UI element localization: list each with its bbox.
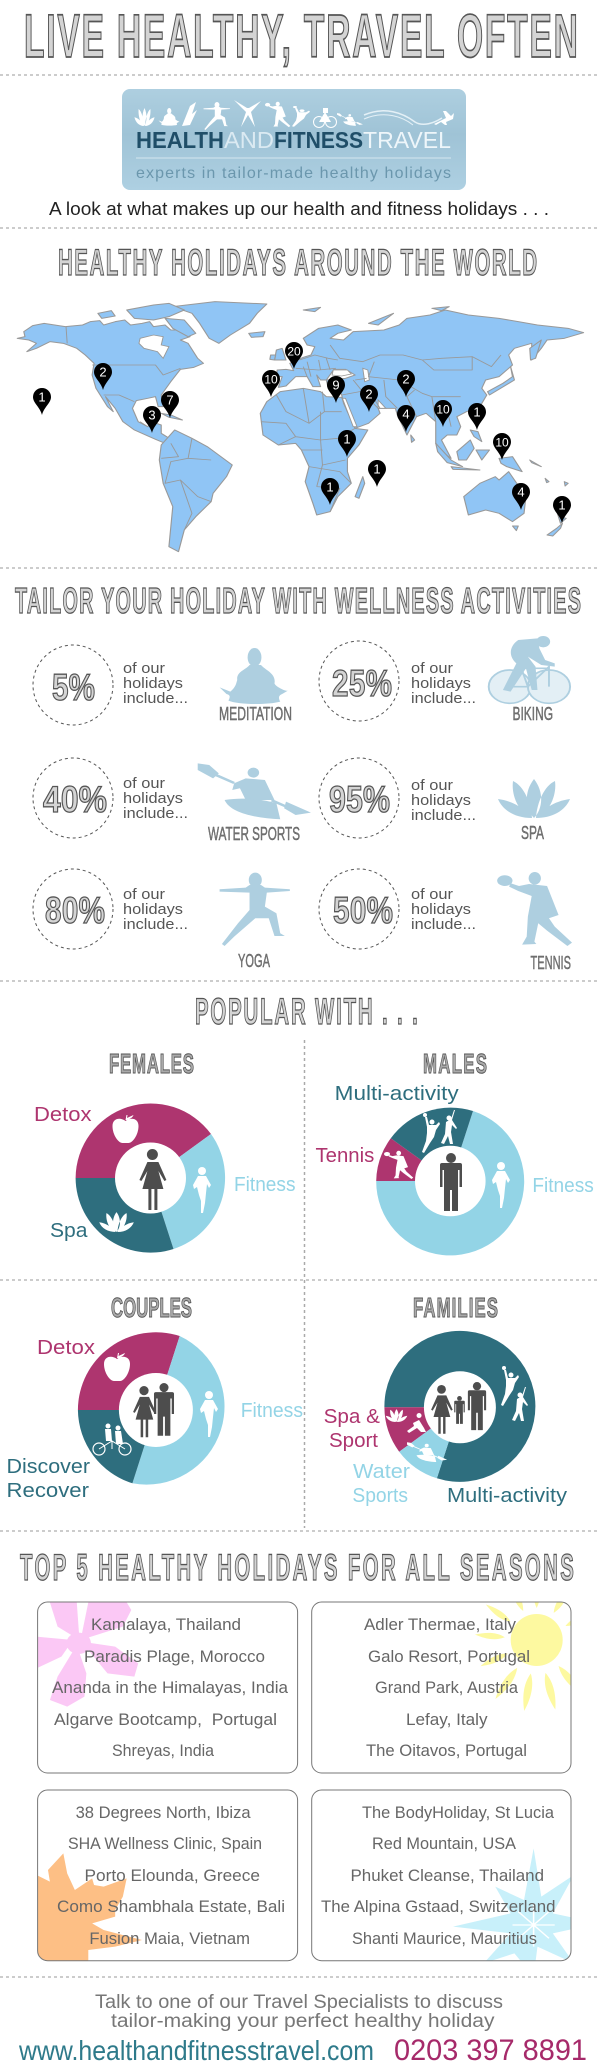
panel: biking stat: BIKING bbox=[512, 704, 553, 724]
list: winter holidays: The BodyHoliday, St Lucia bbox=[362, 1803, 555, 1822]
pin: 1 New Zealand bbox=[553, 496, 571, 523]
logo activity silhouettes bbox=[134, 100, 454, 130]
pin: 1 Kenya: 1 bbox=[343, 432, 351, 446]
pin: 1 New Zealand: 1 bbox=[558, 498, 566, 512]
panel: males: MALES bbox=[423, 1048, 487, 1079]
pin: 1 Kenya bbox=[338, 430, 356, 457]
list: autumn holidays: 38 Degrees North, Ibiza bbox=[76, 1803, 251, 1822]
donut chart: males bbox=[376, 1108, 524, 1255]
call to action: tailor-making your perfect healthy holiday bbox=[111, 2011, 495, 2032]
panel: families: Sport bbox=[329, 1430, 378, 1452]
panel: couples: Fitness bbox=[241, 1400, 303, 1422]
list: spring holidays: Shreyas, India bbox=[112, 1741, 214, 1760]
logo wordmark: AND bbox=[224, 127, 274, 153]
list: autumn holidays bbox=[57, 1803, 285, 1948]
list: spring holidays: Algarve Bootcamp, Portugal bbox=[54, 1710, 277, 1729]
list: winter holidays: Red Mountain, USA bbox=[372, 1834, 517, 1853]
panel: tennis stat: holidays bbox=[411, 901, 471, 918]
pin: 10 Indonesia bbox=[493, 433, 511, 460]
panel: females: Spa bbox=[50, 1220, 88, 1242]
list: summer holidays bbox=[364, 1615, 530, 1760]
panel: couples: Detox bbox=[37, 1337, 95, 1359]
list: summer holidays: Lefay, Italy bbox=[406, 1710, 488, 1729]
list: autumn holidays: Fusion Maia, Vietnam bbox=[89, 1929, 250, 1948]
pin: 1 Philippines: 1 bbox=[473, 404, 481, 420]
list: summer holidays: Adler Thermae, Italy bbox=[364, 1615, 516, 1634]
panel: meditation stat: of our bbox=[123, 660, 165, 677]
pin: 1 Hawaii: 1 bbox=[38, 390, 46, 404]
panel: summer list bbox=[311, 1602, 572, 1774]
logo wordmark: TRAVEL bbox=[363, 127, 451, 153]
panel: spa stat: include... bbox=[411, 807, 476, 824]
logo tagline: experts in tailor-made healthy holidays bbox=[136, 165, 451, 182]
panel: biking stat: holidays bbox=[411, 675, 471, 692]
pin: 2 California: 2 bbox=[99, 364, 107, 380]
panel: tennis stat: include... bbox=[411, 916, 476, 933]
panel: yoga stat: YOGA bbox=[238, 951, 270, 971]
pin: 7 Caribbean bbox=[161, 391, 179, 418]
panel: water sports stat: WATER SPORTS bbox=[208, 824, 300, 844]
pin: 2 Himalayas: 2 bbox=[402, 372, 410, 386]
pin: 20 Central Europe: 20 bbox=[287, 344, 301, 358]
panel: meditation stat: 5% bbox=[52, 668, 95, 709]
pin: 3 Mexico: 3 bbox=[148, 408, 156, 422]
logo panel bbox=[122, 89, 466, 190]
map pins bbox=[33, 342, 571, 523]
list: autumn holidays: Como Shambhala Estate, Bali bbox=[57, 1897, 285, 1916]
panel: females: FEMALES bbox=[109, 1048, 194, 1079]
panel: tennis stat: 50% bbox=[333, 891, 393, 932]
phone number: 0203 397 8891 bbox=[394, 2034, 587, 2067]
panel: tennis stat: of our bbox=[411, 886, 453, 903]
pin: 1 Hawaii bbox=[33, 388, 51, 415]
panel: females: Fitness bbox=[234, 1174, 296, 1196]
icon: tennis player bbox=[497, 872, 572, 946]
panel: males: Fitness bbox=[532, 1175, 594, 1197]
panel: meditation stat: include... bbox=[123, 690, 188, 707]
panel: spa stat: 95% bbox=[329, 779, 390, 821]
panel: families: FAMILIES bbox=[413, 1292, 498, 1323]
list: spring holidays: Kamalaya, Thailand bbox=[91, 1615, 241, 1634]
panel: biking stat: 25% bbox=[332, 664, 392, 705]
panel: families: Spa & bbox=[324, 1406, 381, 1428]
panel: meditation stat: MEDITATION bbox=[219, 704, 292, 724]
donut chart: females bbox=[76, 1103, 225, 1253]
pin: 20 Central Europe bbox=[285, 342, 303, 369]
panel: spa stat bbox=[319, 758, 570, 843]
panel: families: Multi-activity bbox=[447, 1485, 567, 1507]
list: winter holidays: Shanti Maurice, Mauritius bbox=[352, 1929, 537, 1948]
panel: families: Sports bbox=[352, 1485, 408, 1507]
logo wordmark: FITNESS bbox=[274, 127, 363, 153]
panel: females: Detox bbox=[34, 1104, 92, 1126]
icon: snowflake bbox=[454, 1848, 570, 1960]
logo wordmark: HEALTH bbox=[136, 127, 224, 153]
list: autumn holidays: SHA Wellness Clinic, Spain bbox=[68, 1834, 262, 1853]
panel: spa stat: of our bbox=[411, 777, 453, 794]
icon: pink flower bbox=[36, 1602, 138, 1707]
icon: yoga pose bbox=[220, 873, 290, 946]
panel: meditation stat: holidays bbox=[123, 675, 183, 692]
pin: 10 Thailand: 10 bbox=[436, 402, 450, 416]
pin: 10 Thailand bbox=[434, 400, 452, 427]
pin: 1 Philippines bbox=[468, 403, 486, 430]
panel: females bbox=[34, 1048, 296, 1253]
pin: 2 California bbox=[94, 363, 112, 390]
logo wordmark bbox=[136, 127, 451, 153]
pin: 10 Iberia: 10 bbox=[264, 372, 278, 386]
panel: yoga stat: of our bbox=[123, 886, 165, 903]
panel: yoga stat: include... bbox=[123, 916, 188, 933]
panel: tennis stat: TENNIS bbox=[530, 953, 571, 973]
panel: winter list bbox=[311, 1790, 572, 1962]
panel: yoga stat bbox=[33, 869, 290, 971]
icon: lotus bbox=[498, 779, 570, 818]
list: summer holidays: Grand Park, Austria bbox=[375, 1678, 519, 1697]
title: LIVE HEALTHY, TRAVEL OFTEN bbox=[24, 2, 578, 71]
panel: water sports stat: 40% bbox=[43, 780, 107, 821]
list: winter holidays: The Alpina Gstaad, Switzerland bbox=[321, 1897, 556, 1916]
pin: 4 Australia bbox=[512, 483, 530, 510]
list: summer holidays: The Oitavos, Portugal bbox=[366, 1741, 527, 1760]
pin: 9 Mediterranean bbox=[327, 376, 345, 403]
pin: 1 South Africa bbox=[321, 478, 339, 505]
panel: autumn list bbox=[36, 1790, 298, 1962]
pin: 9 Mediterranean: 9 bbox=[332, 378, 340, 392]
icon: cyclist bbox=[489, 636, 570, 703]
panel: spa stat: SPA bbox=[521, 823, 544, 843]
panel: males bbox=[316, 1048, 594, 1255]
panel: water sports stat: include... bbox=[123, 805, 188, 822]
donut chart: families bbox=[384, 1331, 535, 1482]
pin: 2 Arabia bbox=[360, 385, 378, 412]
pin: 4 India bbox=[397, 405, 415, 432]
icon: sun bbox=[475, 1602, 570, 1711]
list: spring holidays: Paradis Plage, Morocco bbox=[84, 1647, 265, 1666]
pin: 1 South Africa: 1 bbox=[326, 480, 334, 494]
world map bbox=[17, 302, 584, 552]
pin: 10 Iberia bbox=[262, 370, 280, 397]
panel: couples: Recover bbox=[6, 1480, 89, 1502]
panel: water sports stat bbox=[33, 758, 311, 844]
heading: activities: TAILOR YOUR HOLIDAY WITH WELLNESS ACTIVITIES bbox=[15, 582, 581, 622]
panel: water sports stat: holidays bbox=[123, 790, 183, 807]
panel: meditation stat bbox=[33, 645, 292, 725]
panel: spring list bbox=[36, 1602, 298, 1773]
pin: 4 India: 4 bbox=[402, 406, 410, 422]
panel: biking stat: of our bbox=[411, 660, 453, 677]
hudson bay and inland seas bbox=[139, 335, 386, 427]
website url: www.healthandfitnesstravel.com bbox=[18, 2035, 374, 2066]
icon: meditation bbox=[220, 648, 288, 704]
panel: spa stat: holidays bbox=[411, 792, 471, 809]
heading: top 5: TOP 5 HEALTHY HOLIDAYS FOR ALL SEASONS bbox=[20, 1548, 574, 1589]
list: spring holidays bbox=[52, 1615, 289, 1760]
panel: yoga stat: holidays bbox=[123, 901, 183, 918]
donut chart: couples bbox=[78, 1332, 225, 1485]
icon: tandem bicycle bbox=[93, 1424, 131, 1455]
pin: 3 Mexico bbox=[143, 406, 161, 433]
list: autumn holidays: Porto Elounda, Greece bbox=[84, 1866, 260, 1885]
call to action bbox=[95, 1992, 503, 2032]
panel: couples bbox=[6, 1292, 303, 1502]
pin: 4 Australia: 4 bbox=[517, 484, 525, 500]
pin: 1 Mauritius: 1 bbox=[373, 462, 381, 476]
list: summer holidays: Galo Resort, Portugal bbox=[368, 1647, 530, 1666]
pin: 1 Mauritius bbox=[368, 460, 386, 487]
subtitle: A look at what makes up our health and fitness holidays . . . bbox=[49, 199, 549, 219]
pin: 2 Arabia: 2 bbox=[365, 386, 373, 402]
icon: maple leaf bbox=[36, 1853, 142, 1962]
panel: families: Water bbox=[353, 1461, 410, 1483]
list: spring holidays: Ananda in the Himalayas, India bbox=[52, 1678, 289, 1697]
panel: yoga stat: 80% bbox=[45, 891, 105, 932]
pin: 10 Indonesia: 10 bbox=[495, 436, 509, 450]
call to action: Talk to one of our Travel Specialists to discuss bbox=[95, 1992, 503, 2013]
heading: popular: POPULAR WITH . . . bbox=[195, 992, 418, 1033]
pin: 2 Himalayas bbox=[397, 370, 415, 397]
pin: 7 Caribbean: 7 bbox=[166, 392, 174, 408]
heading: world: HEALTHY HOLIDAYS AROUND THE WORLD bbox=[58, 243, 537, 284]
panel: tennis stat bbox=[319, 869, 572, 973]
icon: kayaker bbox=[198, 763, 311, 819]
panel: families bbox=[324, 1292, 567, 1507]
panel: biking stat bbox=[319, 636, 570, 724]
panel: couples: COUPLES bbox=[111, 1292, 192, 1323]
panel: couples: Discover bbox=[6, 1456, 90, 1478]
list: winter holidays: Phuket Cleanse, Thailand bbox=[350, 1866, 544, 1885]
panel: biking stat: include... bbox=[411, 690, 476, 707]
list: winter holidays bbox=[321, 1803, 556, 1948]
panel: males: Multi-activity bbox=[335, 1083, 459, 1105]
panel: water sports stat: of our bbox=[123, 775, 165, 792]
panel: males: Tennis bbox=[316, 1145, 374, 1167]
